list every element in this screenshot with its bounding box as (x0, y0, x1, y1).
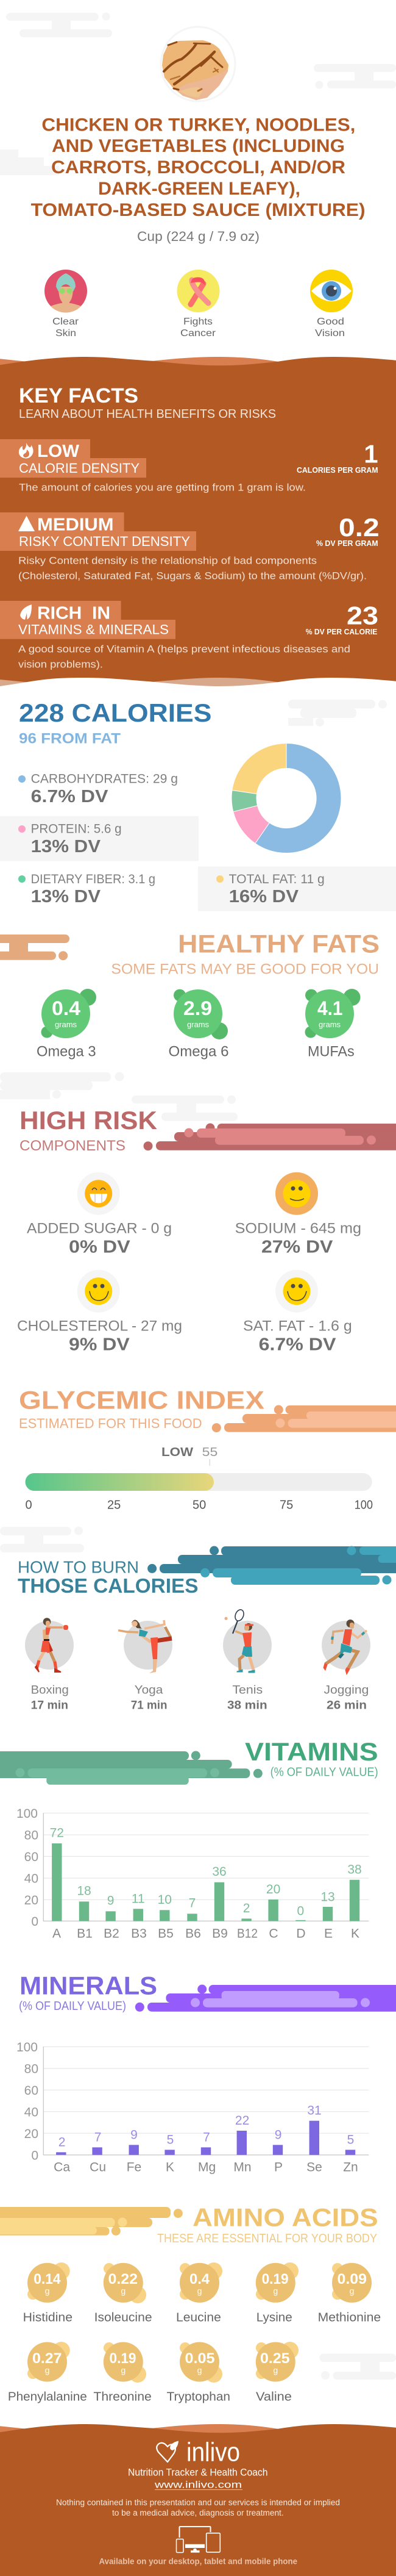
heading: high risk: HIGH RISK (19, 1106, 157, 1135)
bar chart: minerals: Mn (233, 2160, 252, 2174)
food photo: grilled chicken (161, 27, 235, 101)
bar chart: vitamins: 10 (158, 1893, 172, 1907)
heading: those calories: THOSE CALORIES (18, 1574, 199, 1597)
fact: rich in vitamins and minerals: VITAMINS & MINERALS (18, 622, 169, 637)
activity labels: 38 min (227, 1699, 267, 1712)
subheading: calories from fat: 96 FROM FAT (19, 730, 121, 747)
bar chart: minerals: 31 (307, 2104, 322, 2118)
fact: medium risky content density (0, 512, 380, 581)
fact: medium risky content density: % DV PER GRAM (316, 539, 378, 548)
stat: histidine: Histidine (23, 2311, 72, 2324)
stat: omega 6: grams (187, 1020, 210, 1029)
risk: added sugar: ADDED SUGAR - 0 g (27, 1221, 172, 1237)
risk: saturated fat: SAT. FAT - 1.6 g (243, 1318, 352, 1335)
gauge: glycemic index: 75 (280, 1498, 293, 1512)
legend: total fat: 16% DV (229, 887, 299, 906)
title: TOMATO-BASED SAUCE (MIXTURE) (31, 200, 366, 220)
activity labels: Yoga (135, 1684, 163, 1697)
fact: rich in vitamins and minerals: vision problems). (18, 659, 103, 670)
stat: valine (256, 2342, 299, 2403)
stat: leucine (176, 2262, 222, 2324)
activity labels: Boxing (31, 1684, 69, 1697)
disclaimer: to be a medical advice, diagnosis or treatment. (112, 2508, 284, 2517)
fact: medium risky content density: (Cholesterol, Saturated Fat, Sugars & Sodium) to the amount (%DV/gr). (18, 570, 367, 581)
legend: dietary fiber: DIETARY FIBER: 3.1 g (31, 872, 155, 886)
bar chart: vitamins: 100 (16, 1807, 38, 1821)
bar chart: vitamins: 0 (31, 1915, 38, 1929)
title: CARROTS, BROCCOLI, AND/OR (51, 157, 345, 178)
activity labels: 71 min (131, 1699, 167, 1712)
stat: phenylalanine: 0.27 (32, 2350, 62, 2367)
legend: protein: PROTEIN: 5.6 g (31, 822, 122, 836)
bar chart: vitamins: 40 (24, 1872, 38, 1886)
bar chart: vitamins: 72 (50, 1826, 64, 1840)
fact: medium risky content density: 0.2 (339, 513, 380, 542)
benefit: fights cancer: Fights (183, 317, 213, 327)
risk: cholesterol: 9% DV (69, 1335, 130, 1354)
activity: yoga (118, 1620, 172, 1673)
bar chart: minerals: 20 (24, 2127, 38, 2141)
fact: low calorie density: 1 (364, 439, 378, 468)
stat: isoleucine (94, 2263, 152, 2324)
legend: protein: 13% DV (31, 837, 101, 856)
bar chart: vitamins: 20 (266, 1882, 280, 1896)
bar chart: vitamins: 36 (212, 1865, 227, 1879)
decorative bars: healthy fats (0, 935, 69, 960)
stat: histidine: 0.14 (34, 2271, 61, 2287)
bar chart: minerals: Mg (198, 2160, 216, 2174)
stat: omega 3: 0.4 (52, 997, 80, 1019)
legend: dietary fiber: 13% DV (31, 887, 101, 906)
bar chart: vitamins: 9 (107, 1894, 114, 1908)
stat: methionine: 0.09 (338, 2271, 367, 2287)
subheading: LEARN ABOUT HEALTH BENEFITS OR RISKS (19, 407, 276, 421)
stat: methionine (318, 2263, 381, 2324)
subheading: glycemic index: ESTIMATED FOR THIS FOOD (19, 1416, 202, 1431)
bar chart: minerals: P (274, 2160, 283, 2174)
gauge: glycemic index: 100 (355, 1498, 373, 1512)
benefit: fights cancer: Cancer (180, 328, 216, 339)
decorative bars: minerals (135, 1985, 396, 2012)
benefit: clear skin: Skin (55, 328, 76, 339)
bar chart: vitamins: 80 (24, 1829, 38, 1843)
bar chart: vitamins: B9 (212, 1927, 228, 1941)
fact: low calorie density: CALORIES PER GRAM (297, 465, 378, 475)
stat: methionine: Methionine (318, 2311, 381, 2324)
stat: MUFAs: MUFAs (308, 1044, 355, 1060)
disclaimer (56, 2498, 340, 2517)
activity labels: 17 min (31, 1699, 68, 1712)
icon: leaf (20, 605, 32, 620)
logo: inlivo: inlivo (186, 2438, 240, 2467)
bar chart: vitamins: A (52, 1927, 61, 1941)
fact: low calorie density: The amount of calories you are getting from 1 gram is low. (19, 482, 306, 493)
legend: total fat (198, 866, 396, 911)
title (31, 115, 366, 220)
fact: medium risky content density: MEDIUM (37, 515, 114, 534)
stat: phenylalanine (8, 2342, 87, 2403)
risk: cholesterol (17, 1270, 182, 1354)
bar chart: vitamins: 60 (24, 1850, 38, 1864)
title: AND VEGETABLES (INCLUDING (52, 136, 345, 156)
activity labels: Tenis (232, 1684, 263, 1697)
website: www.inlivo.com (154, 2480, 242, 2490)
bar chart: vitamins: B5 (158, 1927, 174, 1941)
bar chart: minerals: 100 (16, 2040, 38, 2054)
panel: footer (0, 2424, 396, 2576)
stat: omega 6: Omega 6 (168, 1044, 229, 1060)
bar chart: vitamins: B12 (237, 1927, 258, 1941)
bar chart: vitamins: B6 (185, 1927, 201, 1941)
activity labels: Jogging (324, 1684, 369, 1697)
heading: how to burn: HOW TO BURN (18, 1557, 139, 1576)
activity: tennis (223, 1609, 272, 1673)
donut chart: macronutrients (232, 743, 341, 853)
bar chart: vitamins: 20 (24, 1893, 38, 1907)
bar chart: vitamins: B2 (104, 1927, 119, 1941)
activity labels (31, 1684, 369, 1712)
stat: phenylalanine: Phenylalanine (8, 2390, 87, 2403)
bar chart: minerals: Ca (54, 2160, 70, 2174)
icon: warning triangle (18, 516, 35, 531)
stat: threonine: 0.19 (110, 2350, 136, 2367)
bar chart: minerals: Zn (343, 2160, 358, 2174)
bar chart: vitamins: D (296, 1927, 306, 1941)
stat: threonine (93, 2342, 152, 2403)
heading: healthy fats: HEALTHY FATS (178, 929, 380, 958)
stat: leucine: g (197, 2286, 202, 2295)
tagline: Nutrition Tracker & Health Coach (128, 2467, 268, 2478)
heading: glycemic index: GLYCEMIC INDEX (19, 1386, 264, 1414)
logo: inlivo (157, 2438, 240, 2467)
gauge: glycemic index: 50 (193, 1498, 206, 1512)
stat: leucine: 0.4 (189, 2271, 210, 2287)
heading: calories: 228 CALORIES (19, 698, 211, 727)
bar chart: minerals: 2 (58, 2135, 65, 2149)
bar chart: vitamins: 38 (347, 1863, 362, 1877)
bar chart: vitamins: K (351, 1927, 359, 1941)
title: CHICKEN OR TURKEY, NOODLES, (41, 115, 355, 135)
stat: MUFAs (305, 989, 361, 1060)
bar chart: minerals: Fe (127, 2160, 141, 2174)
bar chart: vitamins: 13 (320, 1890, 335, 1904)
legend: dietary fiber (18, 872, 155, 906)
benefit: clear skin: Clear (52, 317, 79, 327)
stat: tryptophan (167, 2342, 230, 2403)
risk: sodium (235, 1172, 361, 1257)
stat: MUFAs: grams (319, 1020, 341, 1029)
legend: carbohydrates (18, 772, 178, 806)
risk: sodium: SODIUM - 645 mg (235, 1221, 361, 1237)
legend: carbohydrates: 6.7% DV (31, 787, 108, 806)
stat: tryptophan: Tryptophan (167, 2390, 230, 2403)
risk: added sugar (27, 1172, 172, 1257)
decorative bars: glycemic index (212, 1405, 396, 1432)
stat: valine: 0.25 (260, 2350, 290, 2367)
availability note: Available on your desktop, tablet and mobile phone (99, 2556, 297, 2566)
decorative bars: how to burn (147, 1546, 396, 1585)
stat: lysine: 0.19 (262, 2271, 289, 2287)
gauge: glycemic index: 0 (26, 1498, 32, 1512)
bar chart: minerals: 7 (94, 2130, 101, 2144)
subheading: minerals: (% OF DAILY VALUE) (19, 2000, 126, 2013)
gauge: glycemic index: 25 (107, 1498, 121, 1512)
bar chart: vitamins: B3 (131, 1927, 147, 1941)
bar chart: vitamins: 11 (132, 1892, 145, 1906)
fact: rich in vitamins and minerals: A good source of Vitamin A (helps prevent infectious diseases and (18, 644, 350, 655)
bar chart: minerals: 40 (24, 2106, 38, 2120)
serving size: Cup (224 g / 7.9 oz) (137, 229, 260, 244)
bar chart: vitamins: 0 (297, 1904, 304, 1918)
benefit: good vision: Good (317, 317, 344, 327)
bar chart: minerals: 60 (24, 2084, 38, 2098)
icon: devices (177, 2527, 220, 2553)
bar chart: minerals: 5 (347, 2133, 354, 2147)
heading: key facts: KEY FACTS (19, 384, 138, 407)
bar chart: vitamins: 7 (189, 1896, 196, 1910)
bar chart: minerals: 9 (275, 2128, 281, 2142)
stat: lysine: Lysine (256, 2311, 292, 2324)
stat: tryptophan: 0.05 (185, 2350, 214, 2367)
subheading: vitamins: (% OF DAILY VALUE) (270, 1766, 378, 1779)
fact: low calorie density: CALORIE DENSITY (19, 461, 140, 476)
bar chart: vitamins: E (324, 1927, 333, 1941)
bar chart: minerals: 0 (31, 2148, 38, 2162)
subheading: components: COMPONENTS (19, 1138, 126, 1154)
fact: low calorie density (0, 439, 378, 493)
bar chart: minerals: 7 (203, 2130, 210, 2144)
bar chart: vitamins: 18 (77, 1884, 91, 1898)
stat: omega 3: Omega 3 (37, 1044, 96, 1060)
benefit: good vision: Vision (315, 328, 345, 339)
stat: omega 3: grams (55, 1020, 77, 1029)
stat: leucine: Leucine (176, 2311, 221, 2324)
icon: flame (19, 443, 34, 459)
risk: cholesterol: CHOLESTEROL - 27 mg (17, 1318, 182, 1335)
bar chart: minerals: Se (306, 2160, 322, 2174)
bar chart: minerals: Cu (90, 2160, 106, 2174)
risk: saturated fat: 6.7% DV (259, 1335, 336, 1354)
fact: rich in vitamins and minerals: % DV PER CALORIE (306, 627, 378, 636)
fact: medium risky content density: Risky Content density is the relationship of bad components (18, 554, 317, 566)
decorative bars: amino acids (0, 2207, 183, 2236)
fact: rich in vitamins and minerals (0, 601, 378, 670)
heading: vitamins: VITAMINS (245, 1737, 378, 1766)
benefit: fights cancer (177, 270, 219, 339)
stat: threonine: Threonine (93, 2390, 152, 2403)
bar chart: minerals: 5 (167, 2133, 174, 2147)
stat: valine: g (273, 2365, 278, 2375)
risk: saturated fat (243, 1270, 352, 1354)
decorative bars: high risk (144, 1124, 396, 1150)
benefit: clear skin (44, 270, 87, 339)
fact: rich in vitamins and minerals: 23 (347, 601, 378, 630)
stat: lysine: g (273, 2286, 278, 2295)
stat: omega 6: 2.9 (183, 997, 212, 1019)
stat: histidine: g (45, 2286, 49, 2295)
legend: carbohydrates: CARBOHYDRATES: 29 g (31, 772, 178, 786)
gauge: glycemic index: LOW (161, 1446, 193, 1459)
fact: rich in vitamins and minerals: RICH IN (37, 604, 110, 623)
fact: low calorie density: LOW (37, 442, 80, 461)
stat: histidine (23, 2262, 72, 2324)
activity: boxing (25, 1618, 74, 1672)
legend: total fat: TOTAL FAT: 11 g (229, 872, 325, 886)
bar chart: vitamins (16, 1807, 369, 1941)
gauge: glycemic index: 55 (202, 1446, 217, 1459)
gauge: glycemic index (26, 1446, 373, 1512)
fact: medium risky content density: RISKY CONTENT DENSITY (19, 534, 190, 549)
bar chart: minerals: K (166, 2160, 174, 2174)
stat: lysine (256, 2262, 299, 2324)
stat: isoleucine: 0.22 (108, 2271, 138, 2287)
risk: added sugar: 0% DV (69, 1237, 130, 1257)
stat: phenylalanine: g (45, 2365, 49, 2375)
subheading: amino acids: THESE ARE ESSENTIAL FOR YOUR BODY (157, 2232, 377, 2245)
title: DARK-GREEN LEAFY), (98, 179, 300, 199)
stat: omega 6 (168, 989, 229, 1060)
bar chart: vitamins: B1 (77, 1927, 93, 1941)
bar chart: minerals: 22 (235, 2114, 249, 2128)
stat: omega 3 (37, 989, 96, 1060)
bar chart: vitamins: C (269, 1927, 278, 1941)
bar chart: vitamins: 2 (243, 1901, 250, 1915)
stat: tryptophan: g (197, 2365, 202, 2375)
stat: valine: Valine (256, 2390, 292, 2403)
bar chart: minerals: 80 (24, 2062, 38, 2076)
heading: amino acids: AMINO ACIDS (193, 2203, 378, 2232)
activity labels: 26 min (327, 1699, 367, 1712)
stat: threonine: g (121, 2365, 126, 2375)
benefit: good vision (310, 270, 353, 339)
stat: MUFAs: 4.1 (317, 997, 342, 1019)
risk: sodium: 27% DV (261, 1237, 333, 1257)
legend: protein (0, 816, 199, 861)
stat: isoleucine: g (121, 2286, 126, 2295)
panel: key facts (0, 357, 396, 686)
stat: methionine: g (350, 2286, 354, 2295)
stat: isoleucine: Isoleucine (94, 2311, 152, 2324)
activity: jogging (322, 1620, 370, 1674)
subheading: healthy fats: SOME FATS MAY BE GOOD FOR YOU (111, 961, 379, 977)
bar chart: minerals: 9 (130, 2128, 138, 2142)
heading: minerals: MINERALS (19, 1971, 157, 2000)
disclaimer: Nothing contained in this presentation and our services is intended or implied (56, 2498, 340, 2507)
decorative bars: vitamins (0, 1751, 263, 1785)
bar chart: minerals (16, 2040, 369, 2174)
